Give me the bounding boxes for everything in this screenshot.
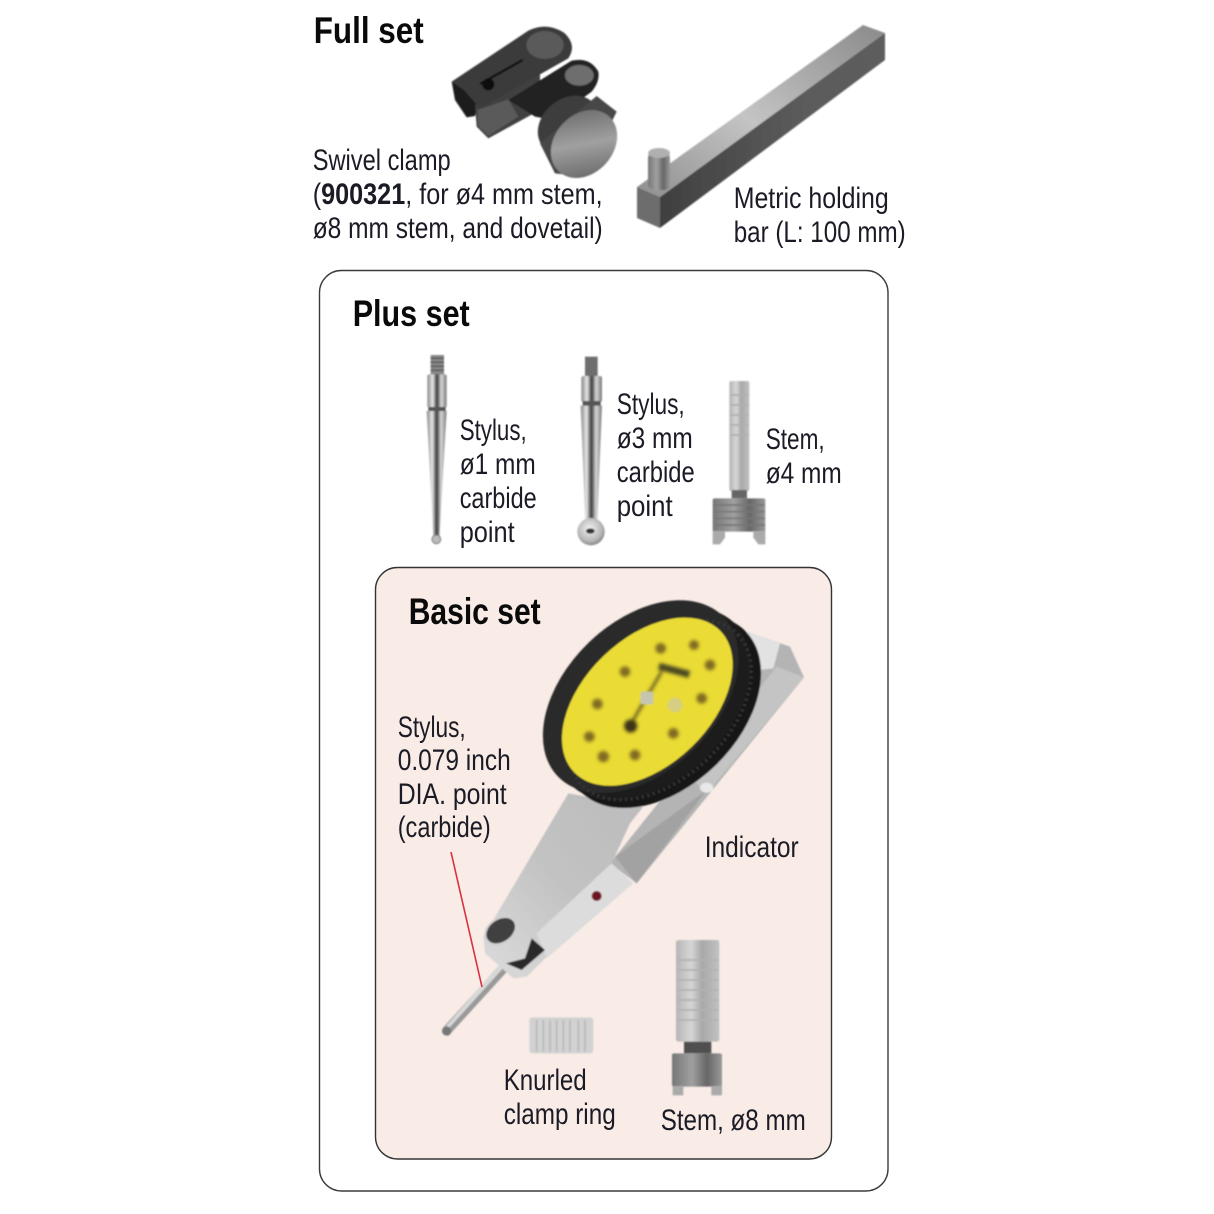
label: stem 4 mm: [766, 423, 842, 490]
label: stem 4 mm: Stem,: [766, 423, 825, 456]
label: indicator: Indicator: [705, 831, 799, 864]
heading: basic set: Basic set: [409, 591, 541, 632]
label: stem 4 mm: ø4 mm: [766, 457, 842, 490]
label: swivel clamp: Swivel clamp: [313, 144, 451, 177]
heading: plus set: Plus set: [353, 293, 470, 334]
label: stylus 0.079 inch: Stylus,: [398, 711, 466, 744]
label: stylus 1 mm: ø1 mm: [460, 448, 536, 481]
label: stylus 1 mm: point: [460, 516, 515, 549]
label: stem 8 mm: Stem, ø8 mm: [661, 1104, 806, 1137]
label: metric holding bar: Metric holding: [734, 182, 889, 215]
label: stylus 1 mm: [460, 414, 537, 549]
label: swivel clamp: (900321, for ø4 mm stem,: [313, 178, 603, 211]
icon: swivel clamp: [452, 27, 631, 191]
label: stylus 3 mm: carbide: [617, 456, 695, 489]
panel: basic set: [376, 563, 832, 1159]
label: knurled clamp ring: Knurled: [504, 1064, 587, 1097]
label: stylus 1 mm: carbide: [460, 482, 537, 515]
icon: stem 8 mm: [672, 940, 722, 1095]
label: stylus 0.079 inch: 0.079 inch: [398, 744, 511, 777]
label: swivel clamp: [313, 144, 603, 245]
panel: full set: [313, 10, 906, 249]
label: knurled clamp ring: clamp ring: [504, 1098, 616, 1131]
label: knurled clamp ring: [504, 1064, 616, 1131]
icon: stylus 1 mm: [427, 355, 447, 544]
label: stylus 3 mm: Stylus,: [617, 388, 685, 421]
leader line: stylus: [451, 852, 482, 987]
icon: knurled clamp ring: [529, 1017, 593, 1053]
label: stylus 0.079 inch: (carbide): [398, 811, 491, 844]
label: stylus 0.079 inch: [398, 711, 511, 844]
heading: full set: Full set: [314, 10, 424, 51]
label: metric holding bar: bar (L: 100 mm): [734, 216, 906, 249]
label: stylus 0.079 inch: DIA. point: [398, 778, 507, 811]
label: metric holding bar: [734, 182, 906, 249]
label: stylus 3 mm: point: [617, 490, 673, 523]
icon: dial test indicator: [442, 563, 804, 1036]
label: stylus 3 mm: [617, 388, 695, 523]
label: stylus 3 mm: ø3 mm: [617, 422, 693, 455]
label: stylus 1 mm: Stylus,: [460, 414, 527, 447]
icon: stylus 3 mm: [577, 357, 605, 545]
icon: metric holding bar: [637, 25, 885, 228]
icon: stem 4 mm: [713, 381, 765, 544]
panel: plus set: [320, 270, 888, 1191]
label: swivel clamp: ø8 mm stem, and dovetail): [313, 212, 603, 245]
